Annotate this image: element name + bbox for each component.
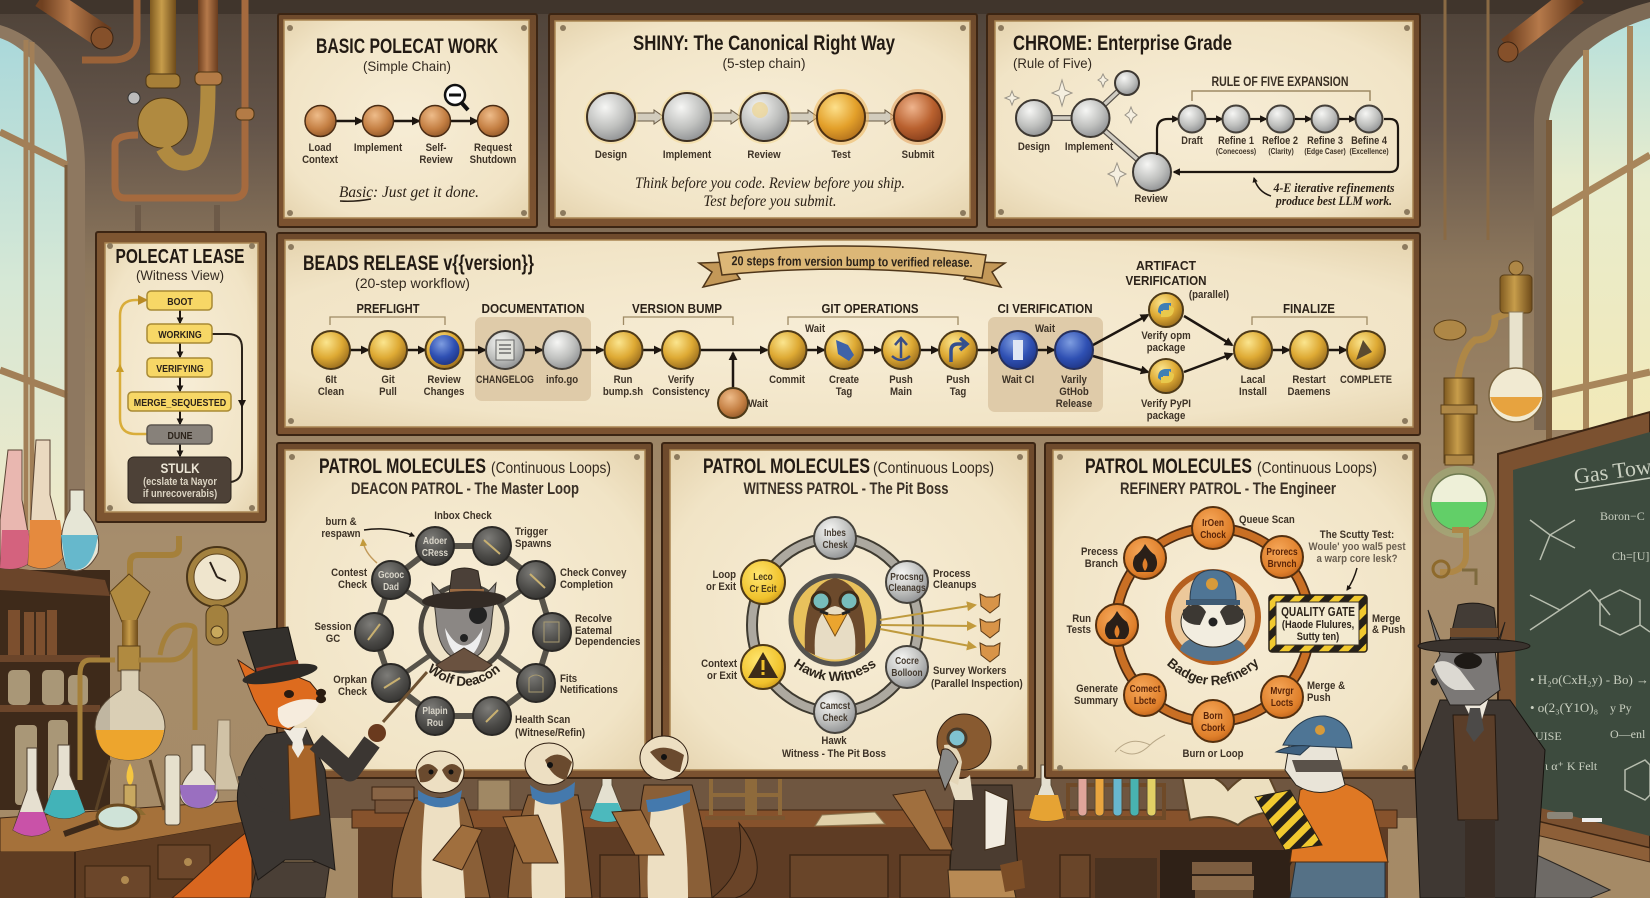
witness node text: Bolloon: [891, 667, 923, 678]
main bench and cabinet: [352, 787, 1397, 898]
ribbon banner: 20 steps from version bump to verified release.: [731, 253, 973, 270]
scutty test callout: Woule' yoo wal5 pest: [1309, 540, 1406, 553]
ribbon banner: [699, 246, 1005, 287]
chrome node labels: [1018, 140, 1168, 205]
subheading: WITNESS PATROL - The Pit Boss: [744, 479, 948, 498]
refinery nodes: [1096, 507, 1303, 742]
witness node text: Cocre: [895, 655, 919, 666]
refinery labels: Branch: [1085, 557, 1118, 570]
state boxes: (ecslate ta Nayor: [143, 476, 217, 488]
workflow labels: Restart: [1292, 373, 1326, 386]
heading: (Continuous Loops): [491, 460, 611, 477]
deacon labels: Contest: [331, 566, 367, 579]
workflow labels: Varily: [1061, 373, 1087, 386]
quality gate: [1269, 595, 1367, 652]
deacon labels: Health Scan: [515, 713, 570, 726]
workflow labels: Lacal: [1241, 373, 1265, 386]
deacon labels: respawn: [321, 527, 361, 540]
state boxes: STULK: [160, 460, 200, 476]
node inner text and icons: Dad: [383, 581, 399, 592]
group headings: FINALIZE: [1283, 301, 1335, 316]
witness node text: Procsng: [890, 571, 924, 582]
witness labels: Cleanups: [933, 578, 977, 591]
workflow labels: package: [1147, 341, 1185, 354]
group headings: GIT OPERATIONS: [822, 301, 919, 316]
workflow labels: bump.sh: [603, 385, 643, 398]
witness nodes: [741, 517, 928, 733]
badger refinery portrait: [1168, 570, 1258, 662]
witness labels: Witness - The Pit Boss: [782, 747, 886, 760]
subheading: (Rule of Five): [1013, 55, 1092, 71]
heading: (Continuous Loops): [873, 460, 994, 477]
state machine arrows: [116, 300, 246, 482]
heading: BEADS RELEASE v{{version}}: [303, 252, 534, 275]
wall clock: [187, 547, 247, 645]
panel: witness patrol: [661, 442, 1036, 779]
refinery labels: Summary: [1074, 694, 1118, 707]
workflow labels: Push: [889, 373, 913, 386]
refinement labels: (Conecoess): [1216, 146, 1257, 156]
rule of five heading: RULE OF FIVE EXPANSION: [1212, 74, 1348, 89]
witness ring: [752, 538, 918, 712]
pipes, top right: [1445, 0, 1577, 240]
shirt and red tie: [283, 728, 307, 758]
workflow labels: Tag: [950, 385, 966, 398]
refinery labels: Push: [1307, 691, 1331, 704]
witness node text: Cleanags: [888, 582, 926, 593]
shaded group backgrounds: [475, 317, 1103, 412]
deacon labels: Eatemal: [575, 624, 612, 637]
node labels: Shutdown: [470, 153, 516, 166]
workflow labels: Create: [829, 373, 859, 386]
witness labels: or Exit: [707, 669, 738, 682]
raised arm: [316, 742, 372, 772]
flame icons and node text: Locts: [1271, 697, 1293, 708]
witness node text: Inbes: [824, 527, 846, 538]
workflow labels: Push: [946, 373, 970, 386]
chain of four nodes: [305, 106, 508, 136]
witness labels: Context: [701, 657, 737, 670]
burn and respawn arrows: [363, 529, 414, 563]
node inner text and icons: Rou: [427, 717, 444, 728]
flame icons and node text: IrOen: [1202, 517, 1224, 528]
chrome node labels: Implement: [1065, 140, 1114, 153]
workflow labels: Pull: [379, 385, 397, 398]
workflow labels: COMPLETE: [1340, 373, 1392, 386]
witness node text: Cr Ecit: [749, 583, 777, 594]
refinery labels: Precess: [1081, 545, 1118, 558]
deacon labels: Check: [338, 685, 367, 698]
heading: BASIC POLECAT WORK: [316, 35, 498, 58]
workflow labels: Install: [1239, 385, 1267, 398]
refinement labels: Refine 3: [1307, 135, 1343, 147]
workflow labels: Verify: [668, 373, 694, 386]
magnifier cursor icon: [445, 85, 468, 110]
chrome node labels: Review: [1134, 192, 1168, 205]
refinery labels: Burn or Loop: [1182, 747, 1244, 760]
chalkboard: y Py: [1610, 701, 1632, 715]
node inner text and icons: Gcooc: [378, 569, 404, 580]
refinery labels: Queue Scan: [1239, 513, 1295, 526]
node inner text and icons: CRess: [422, 547, 448, 558]
quality gate: QUALITY GATE: [1281, 606, 1355, 619]
chalkboard: Boron−C: [1600, 509, 1645, 523]
state boxes: DUNE: [168, 430, 193, 442]
witness labels: [701, 567, 1023, 760]
character: hawk with flying cap: [893, 714, 1025, 898]
fox eye and nose: [284, 689, 326, 703]
witness labels: Hawk: [821, 734, 847, 747]
witness labels: Survey Workers: [933, 664, 1006, 677]
character: first ferret: [392, 751, 490, 898]
fox muzzle: [278, 699, 320, 728]
five step chain: [584, 89, 946, 145]
badger refinery name: Badger Refinery: [1167, 658, 1258, 686]
witness labels: (Parallel Inspection): [931, 677, 1023, 690]
node labels: Self-: [426, 141, 447, 154]
refinery labels: Merge: [1372, 612, 1401, 625]
group headings: VERIFICATION: [1126, 273, 1206, 288]
deacon labels: GC: [326, 632, 341, 645]
chalkboard: • o(2₃(Y1O)₈: [1530, 700, 1598, 715]
group headings: ARTIFACT: [1136, 258, 1196, 273]
deacon labels: (Witnese/Refin): [515, 726, 585, 739]
deacon labels: Recolve: [575, 612, 612, 625]
distillation apparatus: [80, 536, 195, 815]
heading: SHINY: The Canonical Right Way: [633, 32, 895, 55]
deacon labels: Netifications: [560, 683, 618, 696]
refinery labels: & Push: [1372, 623, 1405, 636]
shelf flasks: [0, 440, 99, 571]
flame icons and node text: Mvrgr: [1270, 685, 1294, 696]
node labels: Context: [302, 153, 338, 166]
wolf deacon name: Wolf Deacon: [429, 663, 500, 686]
refinement loop arrows: [1157, 119, 1398, 172]
deacon labels: Inbox Check: [434, 509, 492, 522]
step labels: Test: [831, 148, 851, 161]
node labels: Review: [419, 153, 453, 166]
chalkboard: O—enl: [1610, 727, 1646, 741]
group headings: VERSION BUMP: [632, 301, 722, 316]
deacon labels: burn &: [325, 515, 357, 528]
workflow labels: Main: [890, 385, 912, 398]
survey arrows and worker heads: [880, 594, 1000, 662]
workflow labels: package: [1147, 409, 1185, 422]
handwritten callout: [1254, 178, 1395, 208]
group headings: CI VERIFICATION: [998, 301, 1092, 316]
deacon labels: Fits: [560, 672, 577, 685]
heading: PATROL MOLECULES: [703, 455, 870, 478]
quality gate: (Haode Flulures,: [1282, 619, 1354, 631]
panel: shiny: [549, 14, 977, 227]
workflow labels: Run: [614, 373, 632, 386]
workflow labels: info.go: [546, 373, 579, 386]
subheading: REFINERY PATROL - The Engineer: [1120, 479, 1336, 498]
workflow labels: Wait CI: [1002, 373, 1034, 386]
flame icons and node text: Prorecs: [1266, 546, 1298, 557]
node inner text and icons: Adoer: [423, 535, 448, 546]
flame icons and node text: Comect: [1130, 683, 1160, 694]
top hat: [243, 627, 298, 678]
bench flasks and magnifier: [13, 720, 240, 836]
character: fox with top hat and pointer: [172, 627, 427, 898]
deacon labels: Dependencies: [575, 635, 641, 648]
flame icons and node text: Brvnch: [1268, 558, 1297, 569]
character: third ferret: [612, 736, 757, 898]
witness node text: Check: [822, 712, 848, 723]
subheading: (20-step workflow): [355, 275, 470, 291]
refinery labels: Run: [1072, 612, 1091, 625]
workflow labels: Changes: [424, 385, 464, 398]
refinery labels: Tests: [1067, 623, 1091, 636]
workflow labels: Release: [1056, 397, 1092, 410]
hawk witness portrait: [791, 576, 879, 664]
workflow labels: Verify PyPI: [1141, 397, 1191, 410]
workflow labels: [318, 322, 1392, 422]
deacon labels: Spawns: [515, 537, 552, 550]
refinery labels: [1067, 513, 1405, 760]
group brackets: [330, 317, 1367, 325]
workflow labels: Wait: [1035, 322, 1055, 335]
workflow labels: GtHob: [1059, 385, 1089, 398]
chalkboard: UISE: [1535, 729, 1562, 743]
refinery labels: Generate: [1076, 682, 1118, 695]
steam wisp: [1115, 735, 1165, 754]
subheading: DEACON PATROL - The Master Loop: [351, 479, 579, 498]
waistcoat and shirt: [288, 745, 320, 820]
refinement labels: (Clarity): [1268, 146, 1294, 156]
subheading: (5-step chain): [722, 55, 806, 71]
flame icons and node text: Cbork: [1201, 722, 1226, 733]
copper and brass pipes, top left: [42, 0, 254, 233]
handwritten note: Think before you code. Review before you ship.: [635, 175, 905, 192]
quality gate: Sutty ten): [1297, 631, 1339, 643]
five refinement nodes: [1178, 106, 1382, 132]
workflow labels: CHANGELOG: [476, 373, 534, 386]
heading: (Continuous Loops): [1257, 460, 1377, 477]
witness labels: Loop: [712, 568, 737, 581]
refinement labels: Befine 4: [1351, 135, 1387, 147]
scutty test callout: a warp core lesk?: [1317, 552, 1397, 565]
panel: polecat lease: [96, 232, 266, 522]
scutty test callout: The Scutty Test:: [1320, 528, 1394, 541]
refinement labels: (Edge Caser): [1304, 146, 1346, 156]
heading: CHROME: Enterprise Grade: [1013, 32, 1232, 55]
group headings: (parallel): [1189, 288, 1229, 301]
left workbench: [0, 800, 268, 898]
ring nodes: [355, 527, 571, 735]
hat band: [256, 660, 299, 678]
chrome node labels: Design: [1018, 140, 1050, 153]
fox tail: [172, 828, 252, 898]
heading: PATROL MOLECULES: [319, 455, 486, 478]
witness node text: Camcst: [820, 700, 850, 711]
witness labels: Process: [933, 567, 971, 580]
handwritten note: [635, 175, 905, 210]
character: wolf deacon in trench coat: [1415, 603, 1610, 898]
workflow arrows: [350, 315, 1346, 388]
workflow labels: Verify opm: [1141, 329, 1191, 342]
refinement labels: Draft: [1181, 135, 1203, 147]
workflow labels: Clean: [318, 385, 344, 398]
step labels: Implement: [663, 148, 712, 161]
subheading: (Simple Chain): [363, 58, 451, 74]
state boxes: if unrecoverabis): [143, 488, 217, 500]
workflow labels: Daemens: [1288, 385, 1331, 398]
handwritten note: Test before you submit.: [704, 193, 836, 210]
deacon labels: Check Convey: [560, 566, 627, 579]
left shelf with books and bottles: [0, 566, 110, 810]
striped trousers: [250, 862, 330, 898]
node labels: Load: [308, 141, 332, 154]
workflow nodes: [312, 293, 1385, 418]
state boxes: VERIFYING: [156, 363, 204, 375]
scutty test callout: [1309, 528, 1406, 590]
handwritten callout: produce best LLM work.: [1275, 194, 1392, 208]
refinement labels: Refloe 2: [1262, 135, 1298, 147]
fox head: [238, 660, 323, 730]
witness node text: Chesk: [822, 539, 848, 550]
witness node text: [749, 527, 926, 723]
molecule of chrome nodes: [1005, 71, 1171, 191]
deacon labels: Completion: [560, 578, 613, 591]
state boxes: MERGE_SEQUESTED: [134, 397, 226, 409]
workflow labels: Consistency: [652, 385, 710, 398]
deacon labels: Check: [338, 578, 367, 591]
heading: PATROL MOLECULES: [1085, 455, 1252, 478]
bench apparatus: flasks, rack, tubes, book: [478, 760, 1285, 826]
panel: chrome: [987, 14, 1420, 227]
chalkboard: [1498, 412, 1650, 862]
hat brim: [241, 660, 319, 688]
handwritten note: Basic: Just get it done.: [339, 184, 479, 201]
panel: refinery patrol: [1044, 442, 1421, 779]
flame icons and node text: Born: [1203, 710, 1223, 721]
flame icons and node text: Lbcte: [1134, 695, 1156, 706]
step labels: Review: [747, 148, 781, 161]
panel: beads release: [277, 233, 1420, 435]
refinement labels: Refine 1: [1218, 135, 1254, 147]
handwritten callout: 4-E iterative refinements: [1273, 181, 1395, 195]
node labels: [302, 141, 516, 166]
rule of five bracket: [1192, 91, 1370, 101]
group headings: DOCUMENTATION: [482, 301, 584, 316]
deacon labels: [314, 509, 641, 739]
subheading: (Witness View): [136, 267, 224, 283]
refinery ring: [1116, 528, 1310, 722]
deacon labels: Orpkan: [333, 673, 367, 686]
panel: deacon patrol: [276, 442, 653, 779]
flame icons and node text: [1105, 517, 1298, 733]
node labels: Request: [474, 141, 513, 154]
refinement labels: (Excellence): [1349, 146, 1389, 156]
flame icons and node text: Chock: [1200, 529, 1227, 540]
workflow labels: 6It: [325, 373, 337, 386]
deacon labels: Session: [314, 620, 352, 633]
deacon labels: Trigger: [515, 525, 548, 538]
hand: [368, 724, 386, 742]
workflow labels: Review: [427, 373, 461, 386]
wolf deacon loop ring: [374, 546, 552, 716]
witness labels: or Exit: [706, 580, 737, 593]
witness node text: Leco: [753, 571, 773, 582]
state boxes: [128, 291, 231, 503]
node inner text and icons: Plapin: [422, 705, 448, 716]
pointer stick: [383, 672, 427, 722]
state boxes: WORKING: [158, 329, 202, 341]
state boxes: BOOT: [167, 296, 193, 308]
panel: basic polecat work: [278, 14, 537, 227]
refinery labels: Merge &: [1307, 679, 1345, 692]
workflow labels: Wait: [805, 322, 825, 335]
workflow labels: Commit: [769, 373, 805, 386]
step labels: Design: [595, 148, 627, 161]
workflow labels: Wait: [748, 397, 768, 410]
group headings: PREFLIGHT: [356, 301, 420, 316]
hawk witness name: Hawk Witness: [794, 658, 876, 681]
step labels: [595, 148, 935, 161]
chalkboard: Ch=[U]: [1612, 549, 1649, 563]
left window: [0, 25, 85, 530]
lower arm: [246, 775, 283, 805]
workflow labels: Git: [381, 373, 395, 386]
node labels: Implement: [354, 141, 403, 154]
right wall apparatus: [1423, 261, 1543, 585]
node inner text and icons: [368, 535, 559, 728]
character: second ferret: [503, 743, 592, 898]
refinement labels: [1181, 135, 1389, 156]
workflow labels: Tag: [836, 385, 852, 398]
group headings: [356, 258, 1335, 316]
chalkboard: ι α⁺ K Felt: [1545, 759, 1598, 773]
step labels: Submit: [902, 148, 935, 161]
wolf deacon portrait: [421, 568, 507, 671]
tail coat: [237, 728, 335, 880]
right window: [1534, 2, 1650, 440]
character: badger engineer: [1255, 716, 1388, 898]
heading: POLECAT LEASE: [116, 246, 244, 268]
